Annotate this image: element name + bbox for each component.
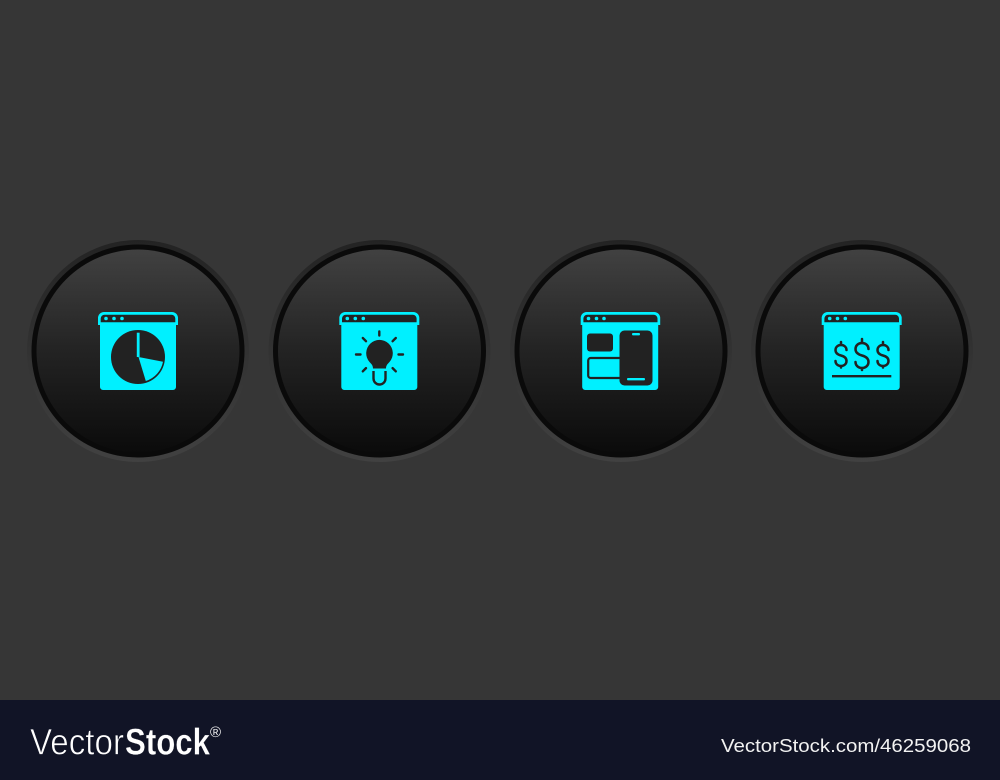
- icon: browser window with dollar signs: [822, 312, 902, 390]
- button: dollar signs browser icon: [751, 240, 973, 462]
- logo: VectorStock: [30, 722, 210, 762]
- logo: VectorStock: Stock: [125, 722, 210, 762]
- logo: VectorStock: Vector: [30, 722, 124, 762]
- button: responsive layout browser icon: [510, 240, 732, 462]
- icon: browser window with tablet and phone: [581, 312, 660, 390]
- icon: browser window with pie chart: [98, 312, 178, 390]
- button: pie chart browser icon: [27, 240, 249, 462]
- icon: browser window with light bulb: [339, 312, 419, 390]
- button: light bulb browser icon: [268, 240, 490, 462]
- logo: registered mark: ®: [210, 724, 221, 741]
- image id url: VectorStock.com/46259068: [721, 736, 971, 756]
- footer bar: [0, 700, 1000, 780]
